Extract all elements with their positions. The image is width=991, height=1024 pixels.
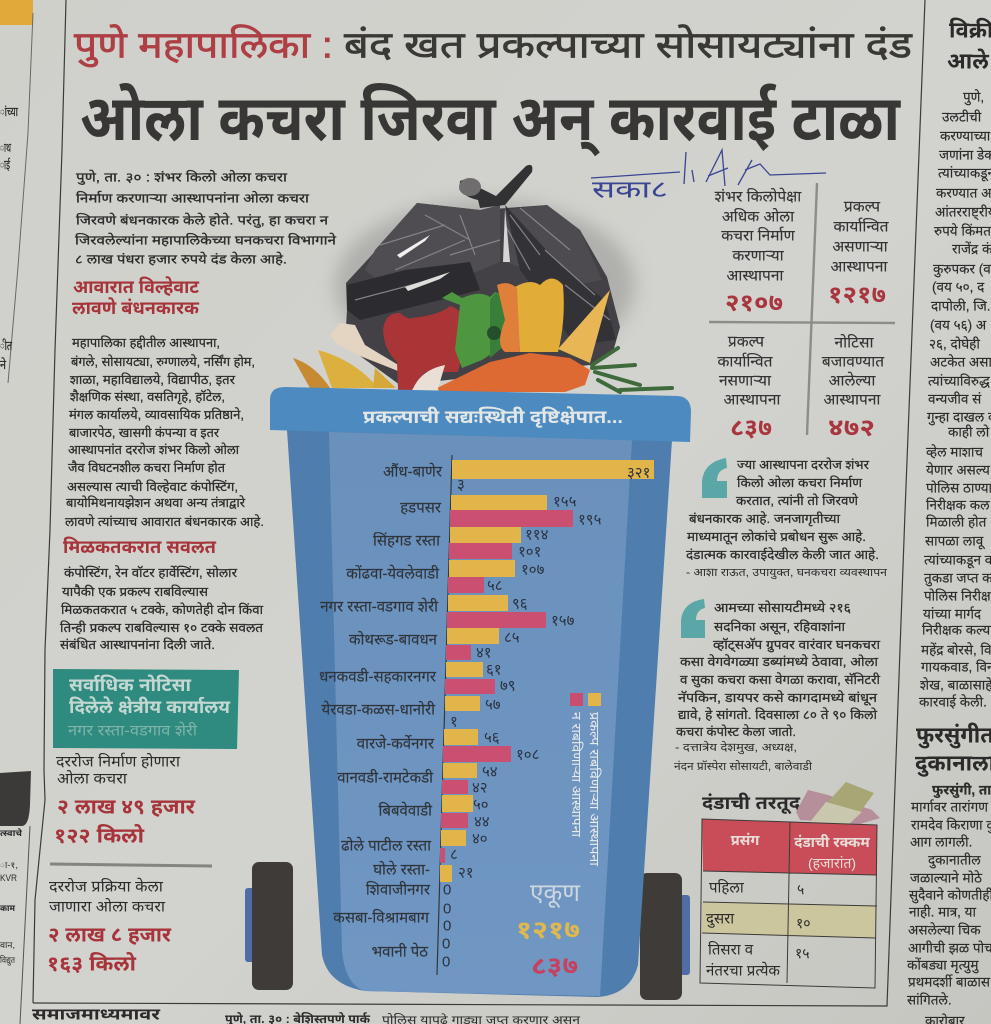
subheading: disposal on premises [72,277,200,318]
neighbouring column: right edge news text: रुपये किंमत [934,222,991,238]
neighbouring column: right edge news text: (वय ५०, द [932,280,985,294]
callout: most notices office [53,669,239,749]
value labels [442,464,650,970]
stat cell: notices issued: नोटिसा [835,334,874,352]
neighbouring column: left edge: ाई [0,157,11,172]
body text: property tax concession: यापैकी एक प्रकल्प राबविल्यास [62,584,209,599]
value labels: 0 [442,954,450,970]
quote 1: commissioner: करतात, त्यांनी तो जिरवणे [736,493,859,508]
zone labels: धनकवडी-सहकारनगर [319,668,437,686]
table: ५ [797,881,804,897]
quote 1: commissioner: ज्या आस्थापना दररोज शंभर [737,457,870,472]
body text: disposal rules: बंगले, सोसायट्या, रुग्णालये, नर्सिंग होम, [71,354,255,369]
value labels: ६१ [486,662,502,678]
neighbouring column: right edge news text: त्यांच्याविरुद्ध [928,372,990,388]
neighbouring column: left edge: विद्युत [0,954,16,966]
intro paragraph: निर्माण करणाऱ्या आस्थापनांना ओला कचरा [76,190,310,206]
icon: banknotes [796,782,880,825]
zone labels: सिंहगड रस्ता [373,532,441,550]
eggshell [412,365,445,392]
subheading: disposal on premises: आवारात विल्हेवाट [73,277,199,297]
zone labels: हडपसर [400,500,442,516]
red vegetable [383,306,467,390]
callout: most notices office: नगर रस्ता-वडगाव शेरी [68,722,198,740]
stat cell: projects not operational: नसणाऱ्या [719,372,772,390]
value labels: 0 [442,936,450,952]
stats grid [709,183,895,442]
zone labels: बिबवेवाडी [378,802,433,820]
neighbouring column: left edge: ाथ [0,141,12,155]
stat cell: notices issued: आलेल्या [829,370,876,390]
value labels: ८ [450,846,458,864]
quote 2: society president: द्यावे, हे सांगतो. दिवसाला ८० ते ९० किलो [678,707,878,722]
neighbouring column: left edge: काम [0,903,15,913]
value labels: ४२ [472,780,488,796]
neighbouring column: left edge: ांच्या [0,105,19,119]
neighbouring column: left edge: त्स्वाचे [0,826,23,838]
stat: daily wet waste processed: दररोज प्रक्रिया केला [49,876,164,896]
stat cell: projects operational: प्रकल्प [844,198,881,216]
quote 2: society president: कचरा कंपोस्ट केला जातो. [676,724,796,739]
table: प्रसंग [731,832,760,849]
value labels: ३ [457,476,465,494]
zone labels: वानवडी-रामटेकडी [337,768,434,786]
zone labels: कोंढवा-येवलेवाडी [346,564,440,582]
intro paragraph: पुणे, ता. ३० : शंभर किलो ओला कचरा [76,170,288,186]
next article stubs: समाजमाध्यमावर [32,1006,161,1024]
neighbouring column: left edge: ीत [0,338,13,353]
value labels: १५५ [553,494,577,510]
neighbouring column: right edge news text: करण्याच्या [940,128,991,144]
body text: property tax concession: संबंधित आस्थापनांना दिली जाते. [60,637,215,652]
body text: disposal rules: बाजारपेठ, खासगी कंपन्या व इतर [69,425,220,440]
value labels: ८५ [504,630,520,646]
neighbouring column: right edge news text: प्रथमदर्शी बाळास [908,974,991,990]
stat cell: notices issued: आस्थापना [824,392,881,408]
value labels: 0 [443,882,451,898]
stat cell: projects operational: आस्थापना [831,258,888,276]
quote 1: commissioner: - आशा राऊत, उपायुक्त, घनकचरा व्यवस्थापन [686,567,888,579]
stat cell: over 100 kg: अधिक ओला [722,208,795,226]
value labels: ४४ [474,814,490,830]
value labels: ५४ [482,764,498,780]
neighbouring column: right edge news text: कोंबड्या मृत्युमु [907,956,979,974]
handwriting: date note [591,150,826,204]
value labels: ४० [472,830,488,848]
neighbouring column: right edge news text: सुदैवाने कोणतीही [909,886,991,904]
neighbouring column: left edge: वान, [0,940,15,950]
callout: most notices office: सर्वाधिक नोटिसा [69,674,192,695]
stat: daily wet waste generated: १२२ किलो [54,824,145,848]
penalty table section [700,782,880,988]
bar chart: zone-wise status [319,455,654,975]
quote 2: society president: कसा वेगवेगळ्या डब्यांमध्ये ठेवावा, ओला [680,654,879,669]
table: पहिला [709,880,745,896]
quote 2: society president: व सुका कचरा कसा वेगळा करावा, सॅनिटरी [680,672,881,688]
quote 1: commissioner: माध्यमातून लोकांचे प्रबोधन सुरू आहे. [687,529,866,545]
body text: disposal rules: लावणे त्यांच्याच आवारात बंधनकारक आहे. [65,514,264,529]
neighbouring column: left edge: KVR [0,873,17,883]
zone labels [319,462,443,960]
table: १० [796,915,811,931]
body text: disposal rules [65,335,264,529]
stat cell: projects not operational [717,334,781,442]
body text: disposal rules: शैक्षणिक संस्था, वसतिगृहे, हॉटेल, [70,389,225,404]
chart totals: ८३७ [531,952,578,980]
headline: kicker: पुणे महापालिका : [74,24,333,68]
neighbouring column: right edge news text: येणार असल्य [926,460,991,478]
quote 2: society president: नंदन प्रॉस्पेरा सोसायटी, बालेवाडी [674,760,813,773]
stat cell: over 100 kg: कचरा निर्माण [721,226,796,244]
stat cell: notices issued: बजावण्यात [822,354,885,370]
table: दंडाची रक्कम [794,834,870,851]
chart totals: एकूण [530,879,581,908]
value labels: 0 [443,918,451,934]
neighbouring column: right edge news text: महेंद्र बोरसे, वि [921,640,991,658]
bars: not implementing (red) [440,510,573,863]
stat cell: projects operational: असणाऱ्या [832,238,889,256]
stat cell: notices issued: ४७२ [828,414,875,442]
bin lid with title: प्रकल्पाची सद्यःस्थिती दृष्टिक्षेपात... [363,407,623,428]
body text: property tax concession [60,565,264,652]
quote 1: commissioner: किलो ओला कचरा निर्माण [737,475,863,490]
subheading: property tax concession: मिळकतकरात सवलत [63,537,217,557]
neighbouring column: right edge news text: पुणे, [963,88,984,106]
neighbouring column: right edge news text: निरीक्षक कल [926,496,990,512]
neighbouring column: right edge news text: (वय ५६) अ [930,318,987,332]
quote 1: commissioner [686,457,888,579]
bone [330,323,400,371]
value labels: 0 [443,900,451,918]
quote 2: society president: नॅपकिन, डायपर कसे कागदामध्ये बांधून [678,690,878,706]
stat cell: over 100 kg: करणाऱ्या [732,248,785,264]
body text: disposal rules: आस्थापनांत दररोज शंभर किलो ओला [68,442,240,457]
stat cell: projects operational [828,198,890,308]
body text: property tax concession: तिन्ही प्रकल्प राबविल्यास १० टक्के सवलत [60,620,264,635]
chart totals [516,879,581,980]
stat cell: over 100 kg: आस्थापना [727,268,784,284]
value labels: २१ [458,864,474,882]
zone labels: ढोले पाटील रस्ता [341,836,432,854]
intro paragraph: जिरवलेल्यांना महापालिकेच्या घनकचरा विभागाने [75,232,337,248]
neighbouring column: right edge news text: मिळाली होत [926,514,987,530]
table heading: दंडाची तरतूद [702,793,801,815]
intro paragraph [75,170,337,266]
chart legend [569,693,602,867]
neighbouring column: right edge news text: २६, दोघेही [929,334,980,352]
zone labels: वारजे-कर्वेनगर [357,734,435,752]
quote 2: society president: आमच्या सोसायटीमध्ये २१६ [714,600,851,615]
neighbouring column: right edge news text: व्हेल माशाच [926,442,983,460]
value labels: ३२१ [627,464,650,482]
quote mark [681,599,705,638]
stat cell: projects operational: १२१७ [828,282,886,308]
value labels: १९५ [578,512,602,528]
zone labels: औंध-बाणेर [383,462,443,480]
body text: disposal rules: शाळा, महाविद्यालये, विद्यापीठ, इतर [70,372,236,387]
stat cell: projects not operational: आस्थापना [724,392,781,408]
greens [592,348,672,392]
quote 2: society president: सदनिका असून, रहिवाशांना [714,619,846,635]
illustration: garbage bag with food waste [293,165,672,392]
neighbouring column: right edge news text: जळाल्याने मोठे [910,868,983,886]
neighbouring column: left edge: ने [0,357,7,372]
quote 1: commissioner: बंधनकारक आहे. जनजागृतीच्या [689,511,841,526]
zone labels: कोथरूड-बावधन [349,632,438,648]
value labels: ११४ [525,526,549,544]
quote 2: society president: - दत्तात्रेय देशमुख, अध्यक्ष, [675,741,797,754]
body text: disposal rules: जैव विघटनशील कचरा निर्माण होत [68,460,226,475]
bars: implementing (yellow) [440,460,654,882]
neighbouring column: right edge news text: दुकानातील [928,852,981,868]
bin body [287,430,672,997]
stat cell: over 100 kg: २१०७ [725,290,783,316]
bin lid with title [270,387,691,442]
stat: daily wet waste generated: दररोज निर्माण होणारा [56,752,181,770]
bag knot [459,165,532,208]
neighbouring column: left edge: ा-१, [0,860,18,870]
value labels: १०७ [521,562,545,578]
next article stubs [32,1006,580,1024]
headline: main title: ओला कचरा जिरवा अन् कारवाई टाळा [80,83,901,157]
yellow leaves [293,350,396,388]
stat cell: over 100 kg: शंभर किलोपेक्षा [715,186,802,206]
stat cell: over 100 kg [715,186,802,316]
zone labels: नगर रस्ता-वडगाव शेरी [320,598,439,616]
stat cell: projects not operational: प्रकल्प [728,334,765,350]
neighbouring column: right edge news text: त्यांच्याकडून व [924,552,991,570]
value labels: ४१ [476,644,492,662]
intro paragraph: जिरवणे बंधनकारक केले होते. परंतु, हा कचरा न [76,212,329,228]
chart legend: न राबविणाऱ्या आस्थापना [569,712,584,838]
neighbouring column: right edge news text: उलटीची [942,108,982,124]
stat cell: notices issued [822,334,885,442]
chart legend: प्रकल्प राबविणाऱ्या आस्थापना [587,712,602,867]
chart totals: १२१७ [516,916,580,944]
zone labels: शिवाजीनगर [366,882,431,898]
value labels: ९६ [512,596,528,612]
headline: kicker [74,24,913,68]
body text: disposal rules: महापालिका हद्दीतील आस्थापना, [72,335,220,350]
stat cell: projects not operational: ८३७ [730,414,772,442]
neighbouring column: right edge news text: पोलिस निरीक्ष [924,588,991,604]
stat: daily wet waste generated: ओला कचरा [57,770,128,788]
carrot [437,353,590,392]
neighbouring column: right edge news text: आले [947,48,989,74]
neighbouring column: right edge news text: सांगितले. [907,990,952,1008]
quote 1: commissioner: दंडात्मक कारवाईदेखील केली जात आहे. [686,547,879,562]
value labels: १५७ [551,612,575,630]
subheading: disposal on premises: लावणे बंधनकारक [72,298,200,318]
table: दुसरा [706,910,735,928]
quote 2: society president: व्हॉट्सअ‍ॅप ग्रुपवर वारंवार घनकचरा [713,637,881,653]
table: (हजारांत) [808,855,856,871]
stat cell: projects not operational: कार्यान्वित [717,352,774,370]
body text: disposal rules: मंगल कार्यालये, व्यावसायिक प्रतिष्ठाने, [69,407,244,422]
neighbouring column: right edge news text: काही लो [948,424,990,440]
green vegetable [442,292,515,368]
body text: property tax concession: कंपोस्टिंग, रेन वॉटर हार्वेस्टिंग, सोलार [64,565,238,580]
table [700,819,877,988]
table: नंतरचा प्रत्येक [706,962,780,980]
intro paragraph: ८ लाख पंधरा हजार रुपये दंड केला आहे. [75,252,287,266]
zone labels: कसबा-विश्रामबाग [333,910,430,926]
neighbouring column: left edge [0,0,66,1024]
body text: disposal rules: असल्यास त्याची विल्हेवाट कंपोस्टिंग, [67,479,238,494]
neighbouring column: right edge news text: नाही. मात्र, या [909,904,977,920]
value labels: ५८ [487,578,503,594]
value labels: ५७ [485,696,501,714]
neighbouring column: right edge news text: मार्गावर तारांगण [911,798,988,814]
handwriting: date note: सका८ [592,176,668,204]
stat: daily wet waste processed: १६३ किलो [47,952,137,976]
neighbouring column: right edge news text: सापळा लावू [925,534,985,550]
stat cell: projects operational: कार्यान्वित [833,218,890,236]
neighbouring column: right edge news text: अटकेत असा [930,352,991,370]
neighbouring column: right edge news text: आगीची झळ पोच [908,940,991,956]
body text: disposal rules: बायोमिथनायझेशन अथवा अन्य तंत्राद्वारे [66,495,246,510]
neighbouring column: right edge news text: कुरुपकर (व [933,262,991,278]
neighbouring column: right edge news text: यांच्या मार्गद [923,606,982,622]
value labels: १०८ [516,746,539,764]
neighbouring column: right edge news text: आग लागली. [910,834,972,850]
zone labels: घोले रस्ता- [373,860,430,878]
value labels: १ [450,714,458,730]
neighbouring column: right edge news text: तुकडा जप्त क [924,570,991,588]
table: तिसरा व [708,942,754,958]
body text: property tax concession: मिळकतकरात ५ टक्के, कोणतेही दोन किंवा [61,602,264,617]
neighbouring column: right edge news text: कारवाई केली. [919,692,987,710]
quote 2: society president [674,599,881,773]
zone labels: येरवडा-कळस-धानोरी [322,700,436,718]
neighbouring column: right edge news text: पोलिस ठाण्या [926,480,991,496]
callout: most notices office: दिलेले क्षेत्रीय कार्यालय [69,696,231,717]
stat: daily wet waste processed [47,876,172,976]
stat: daily wet waste processed: २ लाख ८ हजार [48,924,172,946]
stat: daily wet waste generated [54,752,196,848]
value labels: १०१ [518,544,541,560]
table: १५ [795,945,810,961]
neighbouring column: right edge news text: वन्यजीव सं [928,390,982,406]
stat: daily wet waste generated: २ लाख ४९ हजार [57,796,196,818]
stat: daily wet waste processed: जाणारा ओला कचरा [49,898,166,916]
value labels: ७९ [500,678,516,694]
value labels: ५६ [484,730,500,746]
yellow vegetable [515,278,564,352]
zone labels: भवानी पेठ [372,942,428,960]
neighbouring column: right edge news text: असलेल्या चिक [908,920,981,938]
headline: kicker: बंद खत प्रकल्पाच्या सोसायट्यांना दंड [344,24,913,66]
wheels [245,862,690,1000]
value labels: ५० [473,796,489,814]
quote mark [702,458,727,498]
cone [558,290,610,363]
